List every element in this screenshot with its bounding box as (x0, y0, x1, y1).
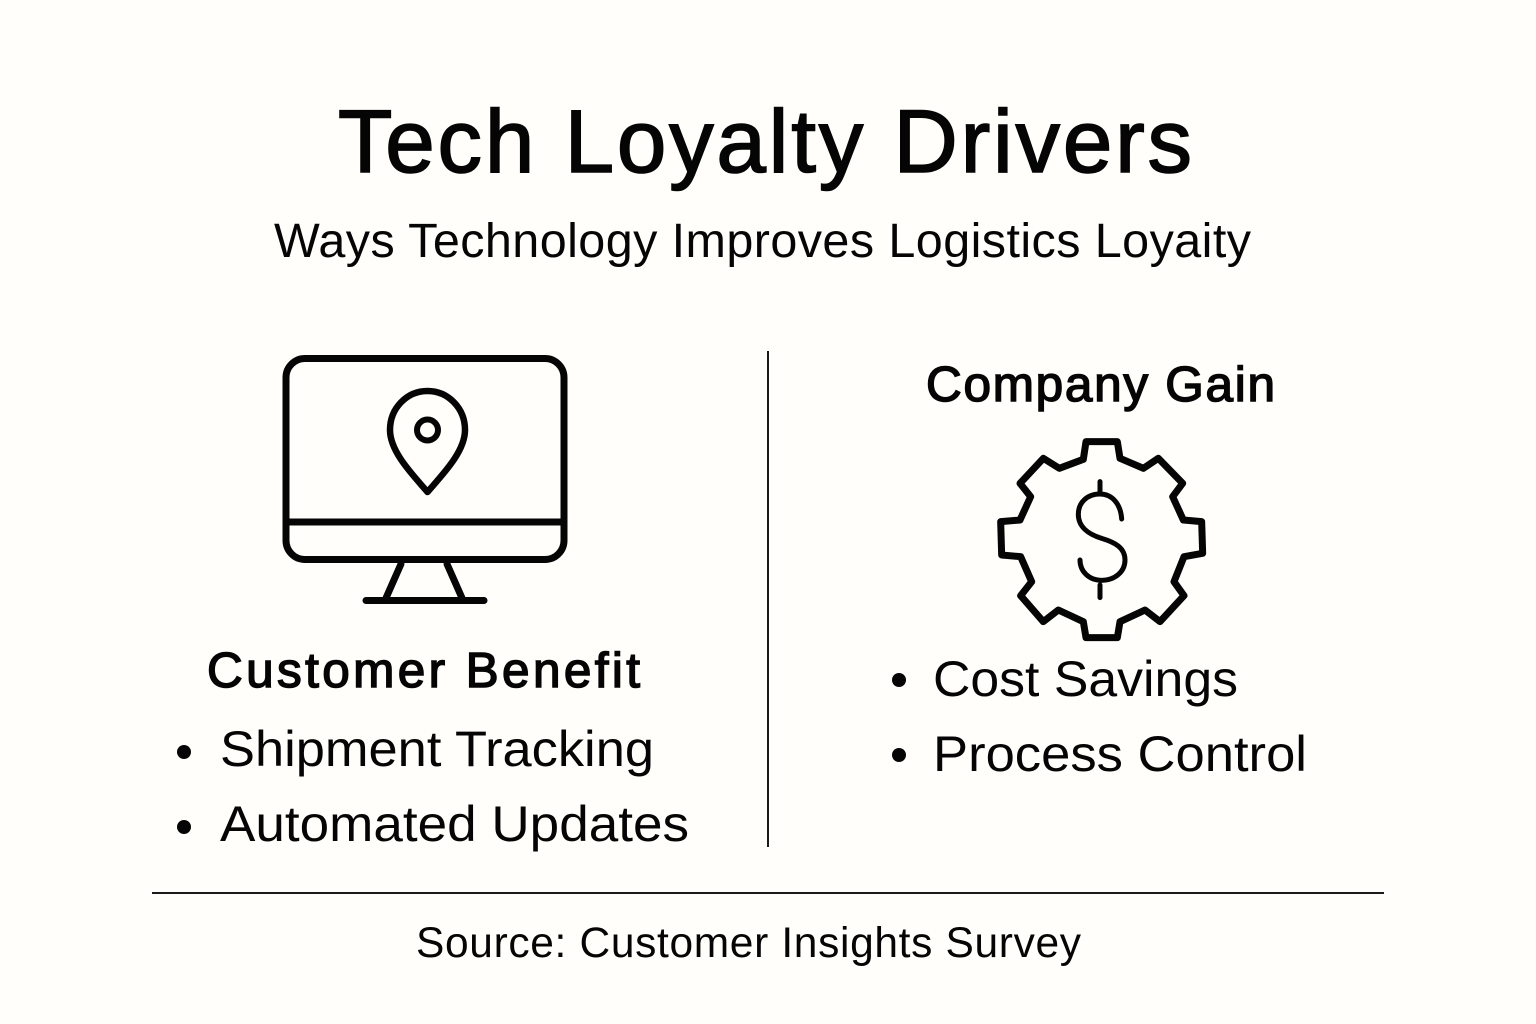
center divider (767, 351, 769, 847)
icon: monitor with location pin (286, 358, 564, 600)
panel: company gain (892, 357, 1307, 782)
list item: process control: Process Control (933, 726, 1307, 782)
list item: cost savings: Cost Savings (933, 651, 1238, 707)
panel: customer benefit (177, 358, 689, 852)
list item: shipment tracking: Shipment Tracking (220, 721, 654, 777)
title: Tech Loyalty Drivers (338, 91, 1192, 191)
subtitle: Ways Technology Improves Logistics Loyaity (274, 214, 1252, 268)
bullet list: company gains (892, 651, 1307, 782)
bullet list: customer benefits (177, 721, 689, 852)
source note: Source: Customer Insights Survey (416, 920, 1082, 967)
footer rule (152, 892, 1384, 894)
heading: customer benefit: Customer Benefit (207, 643, 640, 698)
icon: gear with dollar sign (1001, 442, 1203, 638)
heading: company gain: Company Gain (926, 357, 1275, 412)
list item: automated updates: Automated Updates (220, 796, 689, 852)
